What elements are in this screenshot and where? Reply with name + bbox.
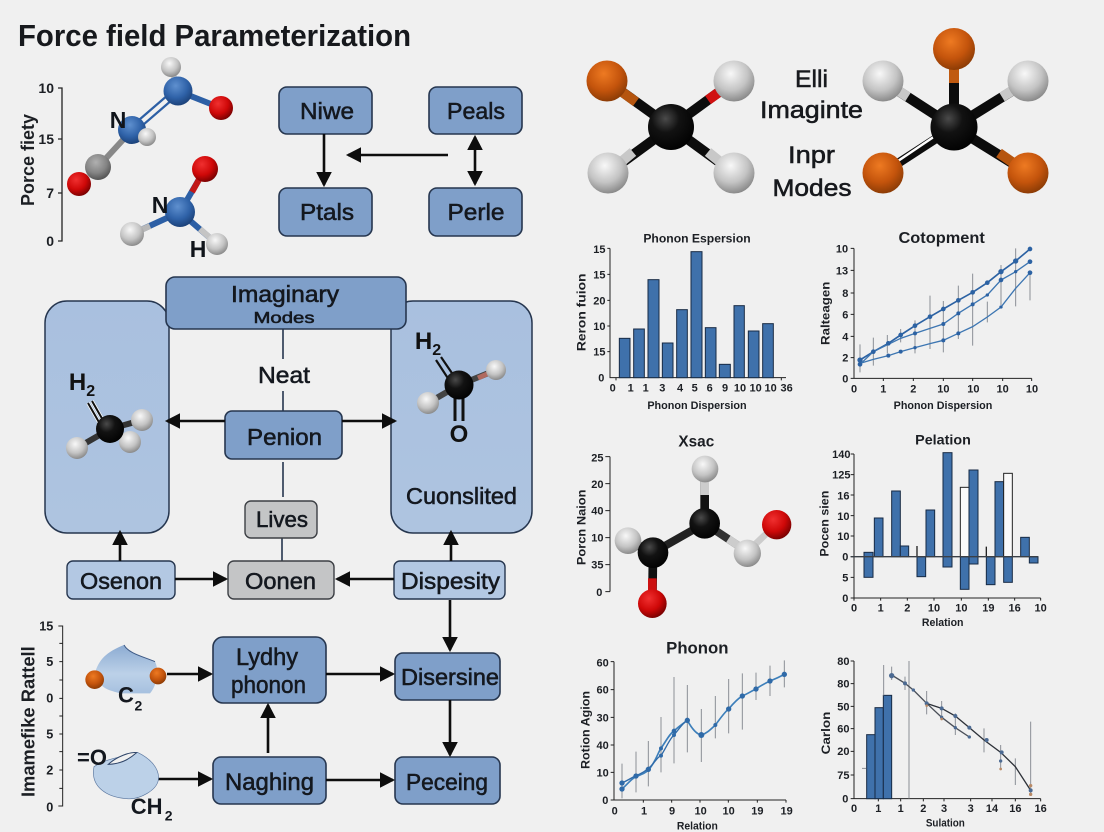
- chart: Pelation bars: 0: [842, 552, 848, 564]
- chart: Pelation bars: 2: [904, 602, 910, 614]
- chart: Phonon lines: 9: [669, 805, 675, 817]
- arrow: Naghing to Peceing: [326, 779, 393, 781]
- header: Imaginary Modes: Modes: [254, 310, 314, 327]
- box: Ptals: Ptals: [300, 199, 354, 225]
- chart: Carlon bars and lines: 0: [851, 803, 857, 815]
- chart: Xsac molecule: [574, 434, 791, 618]
- chart: Phonon lines: 0: [612, 805, 618, 817]
- chart: Pelation bars: 0: [842, 593, 848, 605]
- chart: Carlon bars and lines: 2: [920, 803, 926, 815]
- axis: force field: 15: [38, 131, 54, 147]
- box: Lydhy phonon: phonon: [231, 672, 306, 699]
- chart: Xsac molecule: Xsac: [678, 434, 715, 451]
- chart: Cotopment lines: 10: [967, 383, 979, 395]
- chart: Carlon bars and lines: 1: [875, 803, 881, 815]
- chart: Phonon lines: 40: [597, 740, 609, 752]
- chart: Carlon bars and lines: 3: [941, 803, 947, 815]
- box: Disersine: Disersine: [401, 664, 499, 690]
- axis: Imamefike Rattell: 15: [39, 620, 53, 634]
- box: Lives: Lives: [256, 507, 308, 532]
- chart: Phonon lines: 30: [597, 712, 609, 724]
- chart: Cotopment lines: Ralteagen: [818, 282, 832, 345]
- chart: Pelation bars: 19: [982, 602, 994, 614]
- chart: Carlon bars and lines: 75: [837, 770, 849, 782]
- panel: right Cuonslited: [391, 301, 532, 533]
- chart: phonon dispersion bars: 0: [598, 373, 604, 385]
- chart: Phonon lines: 0: [602, 795, 608, 807]
- molecule: amine: [120, 156, 228, 262]
- chart: phonon dispersion bars: 9: [722, 383, 728, 395]
- arrow: Naghing to Lydhy: [267, 705, 269, 753]
- box: Dispesity: Dispesity: [401, 568, 501, 594]
- chart: Carlon bars and lines: [819, 656, 1047, 830]
- chart: Carlon bars and lines: 80: [837, 679, 849, 691]
- chart: Pelation bars: 16: [837, 490, 849, 502]
- text: Elli Imaginte Inpr Modes: Elli: [795, 66, 828, 93]
- chart: Phonon lines: 19: [781, 805, 793, 817]
- molecule: top right: [862, 28, 1048, 194]
- chart: phonon dispersion bars: 0: [610, 383, 616, 395]
- chart: Cotopment lines: Phonon Dispersion: [894, 400, 993, 412]
- axis: force field: [18, 80, 62, 249]
- chart: phonon dispersion bars: 20: [593, 295, 605, 307]
- box: Oonen: [228, 561, 334, 599]
- chart: Pelation bars: Pelation: [915, 432, 971, 448]
- chart: Pelation bars: Pocen sien: [818, 491, 832, 557]
- flow: lower boxes: [157, 637, 500, 804]
- arrow: C2 to Lydhy: [167, 673, 211, 675]
- box: Penion: [225, 411, 342, 459]
- chart: Pelation bars: 10: [1035, 602, 1047, 614]
- text: Elli Imaginte Inpr Modes: [760, 66, 863, 202]
- arrow: Penion right: [342, 420, 395, 422]
- chart: phonon dispersion bars: 6: [707, 383, 713, 395]
- chart: Carlon bars and lines: Sulation: [926, 818, 965, 830]
- icon: C2 blob: [85, 645, 166, 714]
- text: Elli Imaginte Inpr Modes: Imaginte: [760, 97, 863, 124]
- chart: Pelation bars: 10: [837, 511, 849, 523]
- box: Lives: [245, 501, 317, 538]
- axis: force field: 0: [46, 233, 54, 249]
- axis: Imamefike Rattell: 5: [46, 728, 53, 742]
- header: Imaginary Modes: [166, 277, 406, 329]
- chart: phonon dispersion bars: 15: [593, 269, 605, 281]
- molecule: nitrogen chain: [67, 57, 233, 196]
- chart: phonon dispersion bars: Phonon Dispersion: [647, 400, 747, 412]
- chart: phonon dispersion bars: 1: [628, 383, 634, 395]
- box: Osenon: [67, 561, 175, 599]
- chart: Pelation bars: 140: [832, 449, 850, 461]
- box: Disersine: [395, 653, 500, 700]
- arrow: Dispesity up: [450, 532, 452, 561]
- text: Elli Imaginte Inpr Modes: Modes: [772, 175, 852, 202]
- chart: Pelation bars: Relation: [922, 617, 964, 629]
- chart: Xsac molecule: Porcn Naion: [574, 489, 588, 565]
- chart: Phonon lines: 60: [597, 657, 609, 669]
- chart: phonon dispersion bars: 10: [593, 321, 605, 333]
- chart: Phonon lines: 10: [597, 767, 609, 779]
- box: Perle: [429, 188, 522, 236]
- chart: Carlon bars and lines: 3: [968, 803, 974, 815]
- molecule: H2 left: [66, 369, 153, 459]
- arrow: Peals to left: [348, 154, 448, 156]
- arrow: Disersine to Peceing: [449, 700, 451, 755]
- chart: Pelation bars: 5: [842, 572, 848, 584]
- axis: Imamefike Rattell: 0: [46, 692, 53, 706]
- chart: Cotopment lines: 10: [836, 243, 848, 255]
- chart: Cotopment lines: [818, 230, 1038, 412]
- icon: C2 blob: C: [118, 683, 134, 708]
- chart: Carlon bars and lines: 16: [1035, 803, 1047, 815]
- molecule: H2 right: O: [450, 421, 468, 448]
- chart: Xsac molecule: 0: [596, 587, 602, 599]
- axis: Imamefike Rattell: 5: [46, 655, 53, 669]
- arrow: Osenon to Oonen: [175, 578, 226, 580]
- arrow: blob to Naghing: [157, 778, 211, 780]
- chart: phonon dispersion bars: 3: [659, 383, 665, 395]
- icon: CH2 blob: =O: [77, 745, 107, 770]
- axis: force field: 10: [38, 80, 54, 96]
- chart: Carlon bars and lines: 20: [837, 746, 849, 758]
- box: Peceing: Peceing: [406, 769, 488, 795]
- axis: Imamefike Rattell: Imamefike Rattell: [17, 646, 38, 797]
- chart: Cotopment lines: 6: [842, 309, 848, 321]
- label: Cuonslited: Cuonslited: [406, 483, 517, 509]
- molecule: H2 left: H: [69, 369, 86, 396]
- molecule: H2 right: [415, 328, 506, 448]
- arrow: Osenon up: [119, 532, 121, 561]
- chart: phonon dispersion bars: 10: [750, 383, 762, 395]
- chart: Carlon bars and lines: 14: [986, 803, 999, 815]
- arrow: Dispesity to Disersine: [449, 600, 451, 650]
- chart: Phonon lines: 60: [597, 685, 609, 697]
- chart: Cotopment lines: 2: [910, 383, 916, 395]
- chart: Carlon bars and lines: 16: [1009, 803, 1021, 815]
- arrow: Niwe to Ptals: [323, 134, 325, 185]
- chart: Xsac molecule: 35: [591, 560, 603, 572]
- box: Peals: Peals: [447, 98, 505, 124]
- chart: phonon dispersion bars: 10: [734, 383, 746, 395]
- chart: Phonon lines: Rotion Agion: [578, 691, 592, 769]
- chart: phonon dispersion bars: Reron fuion: [575, 273, 589, 351]
- chart: Xsac molecule: 40: [591, 506, 603, 518]
- box: Naghing: Naghing: [225, 769, 314, 796]
- header: Imaginary Modes: Imaginary: [231, 281, 340, 307]
- chart: Pelation bars: 1: [878, 602, 884, 614]
- chart: Cotopment lines: 10: [937, 383, 949, 395]
- chart: Pelation bars: 0: [851, 602, 857, 614]
- molecule: H2 left: 2: [86, 383, 95, 400]
- icon: C2 blob: 2: [134, 698, 142, 714]
- box: Naghing: [213, 757, 326, 804]
- molecule: H2 right: H: [415, 328, 432, 355]
- molecule: H2 right: 2: [432, 342, 441, 359]
- chart: phonon dispersion bars: Phonon Espersion: [643, 231, 751, 245]
- molecule: amine: N: [152, 192, 168, 218]
- chart: Pelation bars: 10: [955, 602, 967, 614]
- icon: CH2 blob: 2: [165, 808, 173, 824]
- chart: Phonon lines: 10: [695, 805, 707, 817]
- chart: Cotopment lines: 13: [836, 265, 848, 277]
- chart: Cotopment lines: 2: [842, 353, 848, 365]
- chart: Pelation bars: 125: [832, 470, 850, 482]
- arrow: Peals to Perle: [474, 137, 476, 184]
- chart: Carlon bars and lines: 0: [842, 794, 848, 806]
- flow: top boxes: [279, 87, 522, 236]
- chart: phonon dispersion bars: 10: [765, 383, 777, 395]
- chart: phonon dispersion bars: 15: [593, 347, 605, 359]
- chart: Carlon bars and lines: 1: [898, 803, 904, 815]
- chart: Cotopment lines: Cotopment: [898, 230, 986, 247]
- chart: Xsac molecule: 20: [591, 479, 603, 491]
- chart: Cotopment lines: 1: [880, 383, 886, 395]
- chart: Cotopment lines: 4: [842, 331, 849, 343]
- chart: Cotopment lines: 0: [851, 383, 857, 395]
- chart: Carlon bars and lines: Carlon: [819, 712, 833, 754]
- label: Neat: Neat: [258, 362, 311, 388]
- box: Lydhy phonon: [213, 637, 326, 703]
- axis: force field: 7: [46, 185, 54, 201]
- box: Niwe: [279, 87, 372, 134]
- box: Osenon: Osenon: [80, 568, 162, 594]
- chart: Cotopment lines: 0: [842, 373, 848, 385]
- chart: phonon dispersion bars: 4: [677, 383, 684, 395]
- chart: Phonon lines: Phonon: [666, 639, 728, 658]
- arrow: Penion left: [167, 420, 225, 422]
- chart: Phonon lines: 19: [751, 805, 763, 817]
- box: Ptals: [279, 188, 372, 236]
- chart: phonon dispersion bars: 1: [643, 383, 649, 395]
- chart: Carlon bars and lines: 80: [837, 656, 849, 668]
- chart: Carlon bars and lines: 50: [837, 701, 849, 713]
- box: Perle: Perle: [448, 199, 504, 225]
- chart: Xsac molecule: 10: [591, 532, 603, 544]
- chart: Phonon lines: [578, 639, 793, 832]
- arrow: Dispesity to Oonen: [337, 578, 394, 580]
- chart: Cotopment lines: 10: [1026, 383, 1038, 395]
- molecule: nitrogen chain: N: [110, 107, 126, 133]
- icon: CH2 blob: CH: [131, 794, 163, 819]
- title: Force field Parameterization: [18, 18, 411, 53]
- chart: Carlon bars and lines: 60: [837, 723, 849, 735]
- chart: Pelation bars: 10: [837, 531, 849, 543]
- chart: phonon dispersion bars: 36: [781, 383, 793, 395]
- box: Oonen: Oonen: [245, 568, 316, 594]
- chart: phonon dispersion bars: 5: [692, 383, 698, 395]
- icon: CH2 blob: [77, 745, 173, 824]
- chart: phonon dispersion bars: 15: [593, 244, 605, 256]
- panel: left: [45, 301, 169, 533]
- box: Peals: [429, 87, 522, 134]
- chart: Pelation bars: 10: [928, 602, 940, 614]
- axis: Imamefike Rattell: 2: [46, 764, 53, 778]
- chart: Cotopment lines: 10: [997, 383, 1009, 395]
- box: Niwe: Niwe: [300, 98, 354, 124]
- chart: Phonon lines: 10: [723, 805, 735, 817]
- chart: Xsac molecule: 25: [591, 452, 603, 464]
- molecule: amine: H: [190, 236, 206, 262]
- connector lines: [282, 329, 283, 561]
- chart: Pelation bars: 16: [1009, 602, 1021, 614]
- box: Peceing: [395, 757, 500, 804]
- axis: Imamefike Rattell: 0: [46, 800, 53, 814]
- arrow: Lydhy to Disersine: [326, 673, 393, 675]
- chart: Pelation bars: [818, 432, 1047, 629]
- chart: phonon dispersion bars: [575, 231, 793, 412]
- molecule: top center: [586, 60, 754, 194]
- box: Penion: Penion: [247, 424, 322, 450]
- chart: Phonon lines: 1: [641, 805, 647, 817]
- text: Elli Imaginte Inpr Modes: Inpr: [788, 142, 835, 169]
- axis: force field: Porce fiety: [18, 114, 38, 206]
- axis: Imamefike Rattell: [17, 620, 63, 814]
- panel: imaginary modes flow: [45, 277, 532, 650]
- box: Dispesity: [394, 561, 505, 599]
- chart: Cotopment lines: 8: [842, 288, 848, 300]
- box: Lydhy phonon: Lydhy: [236, 644, 298, 671]
